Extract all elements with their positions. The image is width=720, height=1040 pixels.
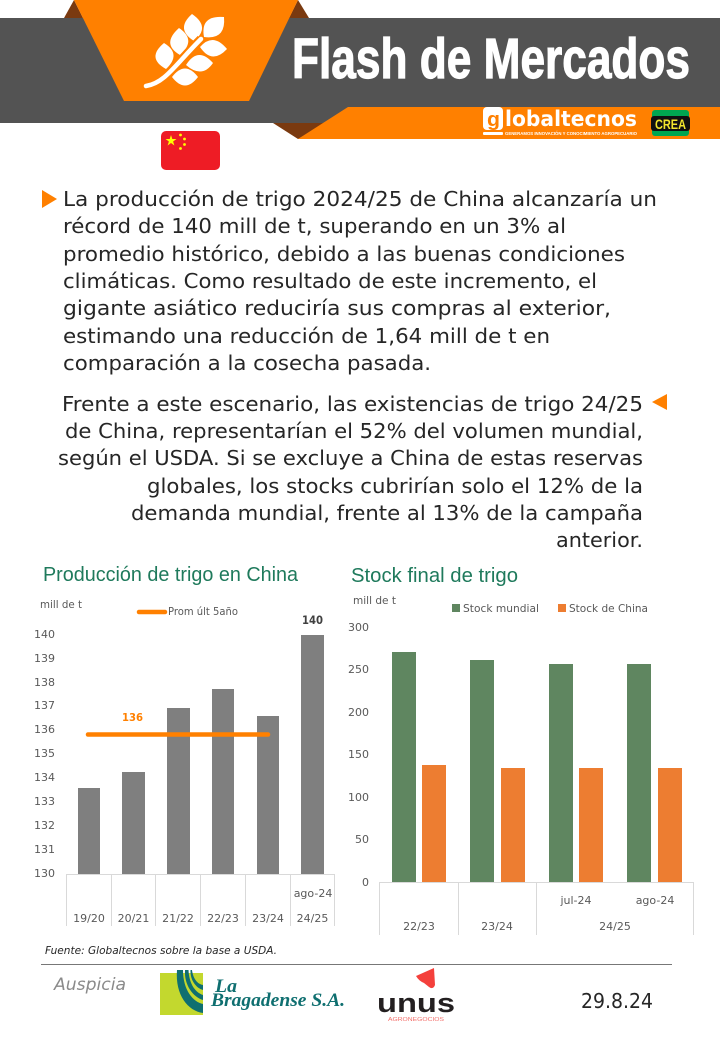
y axis labels: 137 — [34, 699, 55, 712]
x axis labels: jul-24 — [559, 894, 592, 907]
logo: Globaltecnos: lobaltecnos — [505, 107, 637, 131]
y axis labels: 138 — [34, 676, 55, 689]
x axis labels: 22/23 — [403, 920, 435, 933]
legend — [139, 605, 238, 618]
icon: wheat — [146, 14, 227, 86]
x axis labels: 21/22 — [162, 912, 194, 925]
value label: 140 — [302, 613, 323, 627]
chart: Stock final de trigo — [348, 565, 694, 935]
x axis labels: 23/24 — [252, 912, 284, 925]
y axis labels: 131 — [34, 843, 55, 856]
legend: Stock mundial — [463, 602, 539, 615]
y axis labels: 132 — [34, 819, 55, 832]
logo: Unus: unus — [377, 988, 455, 1018]
x axis labels: ago-24 — [294, 887, 332, 900]
y axis labels: 130 — [34, 867, 55, 880]
sponsor label: Auspicia — [53, 975, 126, 995]
source note: Fuente: Globaltecnos sobre la base a USDA. — [45, 944, 277, 957]
text block: production: La producción de trigo 2024/25 de China alcanzaría un — [63, 187, 657, 211]
x axis labels: 24/25 — [599, 920, 631, 933]
logo: CREA: CREA — [655, 116, 686, 132]
logo: Unus: AGRONEGOCIOS — [388, 1017, 444, 1023]
text block: production: climáticas. Como resultado de este incremento, el — [63, 269, 597, 293]
icon: China flag — [161, 131, 220, 170]
text block: stocks: demanda mundial, frente al 13% de la campaña — [131, 501, 643, 525]
y axis labels: 135 — [34, 747, 55, 760]
text block: stocks: de China, representarían el 52% del volumen mundial, — [65, 419, 643, 443]
y axis labels: 200 — [348, 706, 369, 719]
text block: production: estimando una reducción de 1,64 mill de t en — [63, 324, 550, 348]
logo: La Bragadense: Bragadense S.A. — [210, 990, 345, 1011]
bars — [78, 635, 324, 874]
logo: Globaltecnos — [483, 107, 637, 136]
chart title: Producción de trigo en China — [43, 564, 299, 586]
date: 29.8.24 — [581, 989, 653, 1013]
average line — [88, 732, 268, 737]
y axis labels: 140 — [34, 628, 55, 641]
y axis labels — [34, 628, 55, 880]
logo: CREA — [651, 110, 690, 136]
text block: production: promedio histórico, debido a las buenas condiciones — [63, 242, 625, 266]
y axis labels: 0 — [362, 876, 369, 889]
logo: Unus — [377, 968, 455, 1023]
y axis labels — [348, 621, 369, 889]
text block: stocks: globales, los stocks cubrirían solo el 12% de la — [147, 474, 643, 498]
text block: production: comparación a la cosecha pasada. — [63, 351, 431, 375]
legend: Stock de China — [569, 602, 648, 615]
y axis labels: 136 — [34, 723, 55, 736]
y axis labels: 134 — [34, 771, 55, 784]
logo: Globaltecnos: g — [487, 109, 500, 131]
y axis labels: 133 — [34, 795, 55, 808]
x axis labels: 19/20 — [73, 912, 105, 925]
text block: production — [63, 187, 657, 375]
logo: Globaltecnos: GENERAMOS INNOVACIÓN Y CONOCIMIENTO AGROPECUARIO — [505, 129, 637, 136]
x axis labels — [73, 887, 332, 925]
average value: 136 — [122, 711, 143, 724]
legend — [452, 602, 648, 615]
x axis labels: 20/21 — [118, 912, 149, 925]
text block: stocks: según el USDA. Si se excluye a China de estas reservas — [58, 446, 643, 470]
x axis — [380, 882, 694, 935]
y axis labels: 300 — [348, 621, 369, 634]
y axis labels: 139 — [34, 652, 55, 665]
legend: Prom últ 5año — [168, 605, 238, 618]
y axis labels: 150 — [348, 748, 369, 761]
y axis labels: 250 — [348, 663, 369, 676]
x axis labels — [403, 894, 674, 933]
chart title: Stock final de trigo — [351, 565, 518, 587]
header banner — [0, 0, 720, 139]
text block: stocks: Frente a este escenario, las existencias de trigo 24/25 — [62, 392, 643, 416]
logo: La Bragadense — [160, 970, 345, 1015]
text block: stocks — [58, 392, 643, 552]
x axis labels: 23/24 — [481, 920, 513, 933]
x axis labels: ago-24 — [636, 894, 674, 907]
text block: stocks: anterior. — [556, 528, 643, 552]
y axis labels: 100 — [348, 791, 369, 804]
unit label: mill de t — [40, 598, 83, 611]
x axis labels: 22/23 — [207, 912, 239, 925]
chart: Producción de trigo en China — [34, 564, 334, 926]
bars: world stock — [392, 652, 651, 882]
x axis — [66, 874, 334, 926]
text block: production: récord de 140 mill de t, superando en un 3% al — [63, 214, 566, 238]
bars: China stock — [422, 765, 682, 882]
unit label: mill de t — [353, 594, 397, 607]
y axis labels: 50 — [355, 833, 369, 846]
text block: production: gigante asiático reduciría sus compras al exterior, — [63, 296, 611, 320]
icon: arrow left — [652, 394, 667, 410]
logo: La Bragadense: La — [214, 976, 238, 997]
x axis labels: 24/25 — [297, 912, 328, 925]
icon: arrow right — [42, 190, 57, 208]
